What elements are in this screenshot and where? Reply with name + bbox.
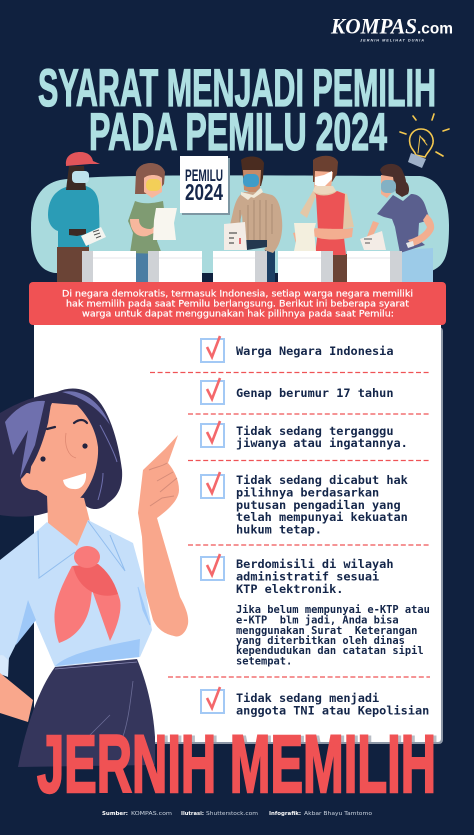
checkbox [201,378,224,404]
credits: Infografik: [269,811,301,817]
item 2: Genap berumur 17 tahun [236,386,394,400]
hair front [0,398,52,490]
item 5: setempat. [236,656,292,668]
item 1: Warga Negara Indonesia [236,344,394,358]
teal backdrop [31,175,449,273]
item 6: Tidak sedang menjadi [236,691,379,705]
sign: Pemilu 2024: PEMILU [185,166,223,185]
logo: Kompas.com [330,14,453,42]
credits: Akbar Bhayu Tamtomo [304,811,372,817]
item 3: Tidak sedang terganggu [236,424,394,438]
item 3: jiwanya atau ingatannya. [236,436,408,450]
icon: light bulb [400,114,449,168]
item 4: Tidak sedang dicabut hak [236,473,408,487]
item 3 [201,421,408,450]
item 5: Berdomisili di wilayah [236,557,394,571]
scarf [54,564,121,643]
item 4: putusan pengadilan yang [236,498,401,512]
panel: intro text [29,282,446,325]
sign: Pemilu 2024: 2024 [185,179,223,205]
item 5: kependudukan dan catatan sipil [236,645,424,657]
item 4 [201,472,408,536]
title [38,59,436,162]
panel: intro text: warga untuk dapat menggunakan hak pilihnya pada saat Pemilu: [82,310,394,320]
item 6: anggota TNI atau Kepolisian [236,704,429,718]
voter 2 [128,163,177,282]
credits: Ilutrasi: [181,811,204,817]
credits: Sumber: [102,811,128,817]
item 5: KTP elektronik. [236,582,343,596]
hand on hip [0,673,33,722]
neck [47,495,90,552]
item 4: hukum tetap. [236,522,322,536]
panel: intro text: Di negara demokratis, termasuk Indonesia, setiap warga negara memiliki [62,290,413,300]
item 5: e-KTP blm jadi, Anda bisa [236,614,399,626]
item 5: menggunakan Surat Keterangan [236,625,417,637]
checkbox [201,336,224,362]
checkbox [201,554,224,580]
item 1 [201,336,394,362]
voter 4 [293,156,354,282]
voter 1 [48,152,106,282]
sign: Pemilu 2024 [180,156,230,215]
panel: intro text: hak memilih pada saat Pemilu berlangsung. Berikut ini beberapa syarat [66,300,410,310]
item 5: Jika belum mempunyai e-KTP atau [236,604,430,616]
logo: Kompas.com: .com [417,20,453,38]
illustration: voters and ballot boxes [48,152,434,282]
arm and hand [138,435,188,636]
logo: Kompas.com: KOMPAS [330,14,417,38]
voter 5 [360,164,434,282]
item 4: telah mempunyai kekuatan [236,510,408,524]
item 6 [201,687,429,718]
item 5: administratif sesuai [236,570,379,584]
item 5: yang diterbitkan oleh dinas [236,635,405,647]
skirt [18,659,155,767]
credits: Shutterstock.com [206,811,258,817]
logo: Kompas.com: JERNIH MELIHAT DUNIA [360,38,424,42]
voter 3 [224,157,282,282]
checkbox [201,421,224,447]
checkbox [201,687,224,713]
face details [47,420,87,429]
ballot boxes [82,251,402,282]
item 2 [201,378,394,404]
face [21,403,98,504]
credits [102,811,372,817]
panel: requirements list background [34,322,443,744]
checkbox [201,472,224,498]
illustration: woman pointing [0,389,188,767]
credits: KOMPAS.com [131,811,172,817]
hair back [0,389,122,517]
blouse [0,520,152,667]
item 4: pilihnya berdasarkan [236,486,379,500]
item 5 [201,554,430,668]
